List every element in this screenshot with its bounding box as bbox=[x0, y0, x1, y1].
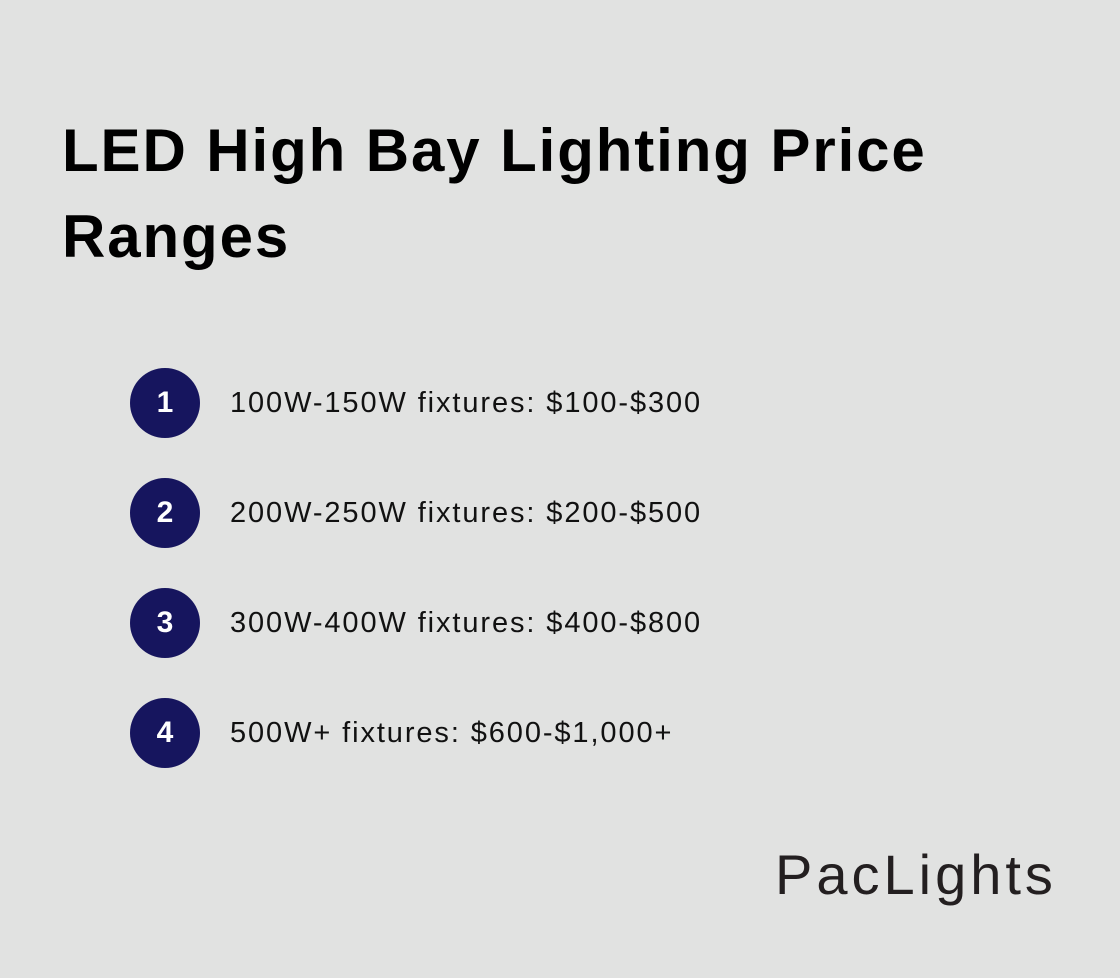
item 1: 1 bbox=[157, 386, 173, 419]
item 3: 3 bbox=[157, 606, 173, 639]
title bbox=[62, 117, 927, 270]
title: LED High Bay Lighting Price bbox=[62, 117, 927, 184]
item 2: 200W-250W fixtures: $200-$500 bbox=[230, 497, 702, 529]
item 3: 300W-400W fixtures: $400-$800 bbox=[230, 607, 702, 639]
logo: PacLights bbox=[775, 843, 1057, 906]
item 2: 2 bbox=[157, 496, 173, 529]
item 1: 100W-150W fixtures: $100-$300 bbox=[230, 387, 702, 419]
item 3 bbox=[130, 588, 702, 658]
item 4: 4 bbox=[157, 716, 173, 749]
item 1 bbox=[130, 368, 702, 438]
item 4 bbox=[130, 698, 673, 768]
title: Ranges bbox=[62, 203, 290, 270]
item 4: 500W+ fixtures: $600-$1,000+ bbox=[230, 717, 673, 749]
item 2 bbox=[130, 478, 702, 548]
